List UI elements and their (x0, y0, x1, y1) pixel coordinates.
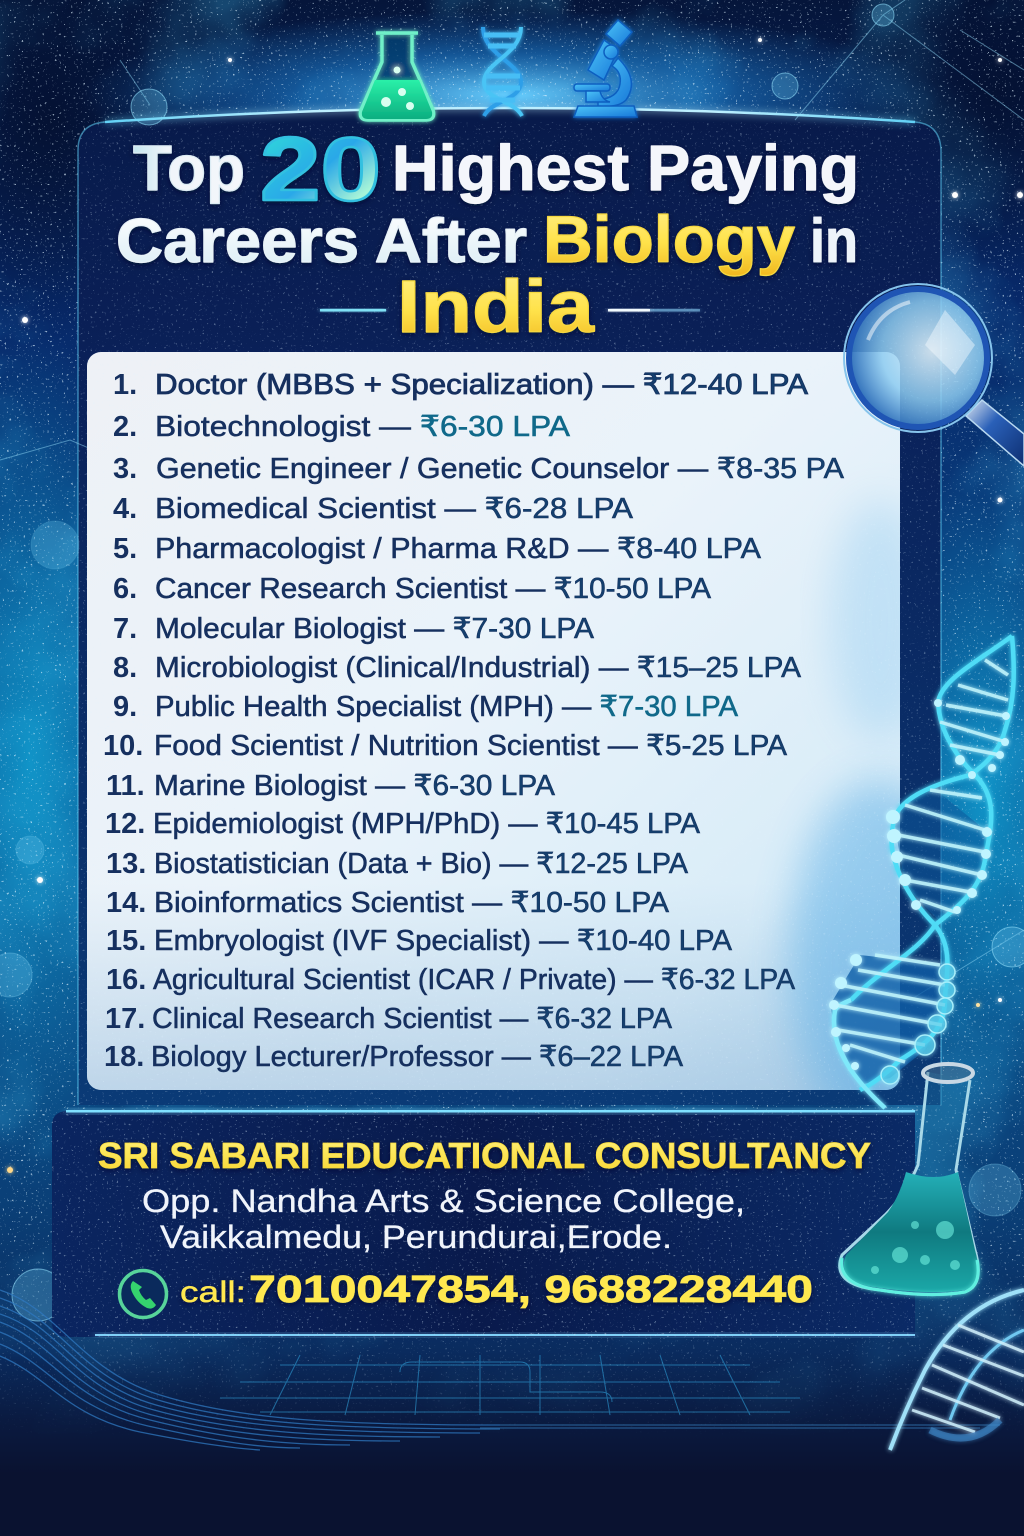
row 11: 11. (106, 770, 145, 802)
row 7: Molecular Biologist — ₹7-30 LPA (155, 613, 595, 645)
horizon glow line (105, 108, 915, 122)
row 5: Pharmacologist / Pharma R&D — ₹8-40 LPA (155, 533, 762, 565)
row 6: Cancer Research Scientist — ₹10-50 LPA (155, 573, 712, 605)
row 15: 15. (106, 925, 146, 957)
row 13: Biostatistician (Data + Bio) — ₹12-25 LPA (154, 848, 689, 880)
title: in (810, 207, 858, 276)
row 3: Genetic Engineer / Genetic Counselor — ₹8-35 PA (156, 453, 845, 485)
row 12: Epidemiologist (MPH/PhD) — ₹10-45 LPA (153, 808, 701, 840)
highlighted word India: India (397, 265, 595, 348)
row 17: 17. (105, 1003, 145, 1035)
highlighted word Biology: Biology (543, 202, 795, 276)
footer: phone numbers: 7010047854, 9688228440 (249, 1269, 813, 1311)
row 8: Microbiologist (Clinical/Industrial) — ₹15–25 LPA (155, 652, 802, 684)
icon: phone (120, 1270, 166, 1318)
row 5: 5. (113, 533, 137, 565)
footer: organisation name: SRI SABARI EDUCATIONAL CONSULTANCY (98, 1135, 871, 1176)
title: Highest Paying (392, 132, 859, 204)
panel star field (78, 122, 941, 1105)
row 18: 18. (104, 1041, 144, 1073)
title (116, 120, 859, 348)
circuit grid floor (220, 1355, 800, 1415)
glass flask (840, 1064, 978, 1295)
row 14: Bioinformatics Scientist — ₹10-50 LPA (154, 887, 670, 919)
row 3: 3. (113, 453, 137, 485)
footer: address (142, 1183, 745, 1255)
row 11: Marine Biologist — ₹6-30 LPA (154, 770, 556, 802)
row 16: 16. (106, 964, 146, 996)
footer star field (52, 1112, 915, 1337)
main dark panel (78, 108, 941, 1105)
icon: microscope (574, 20, 637, 117)
row 2: 2. (113, 411, 137, 443)
footer: phone numbers: call: (180, 1276, 246, 1309)
title side rules (320, 309, 700, 312)
row 15: Embryologist (IVF Specialist) — ₹10-40 LPA (154, 925, 733, 957)
row 2: Biotechnologist — ₹6-30 LPA (155, 411, 571, 443)
row 10: Food Scientist / Nutrition Scientist — ₹5-25 LPA (154, 730, 788, 762)
career list (103, 369, 845, 1073)
row 14: 14. (106, 887, 146, 919)
wave lines bottom left (0, 1290, 1000, 1450)
row 18: Biology Lecturer/Professor — ₹6–22 LPA (151, 1041, 684, 1073)
icon: flask (360, 33, 434, 120)
title: Careers After (116, 207, 527, 276)
row 12: 12. (105, 808, 145, 840)
DNA bottom right (890, 1290, 1024, 1450)
footer panel (52, 1110, 915, 1337)
row 9: Public Health Specialist (MPH) — ₹7-30 LPA (155, 691, 739, 723)
icon: DNA helix (483, 27, 522, 116)
row 4: Biomedical Scientist — ₹6-28 LPA (155, 493, 634, 525)
row 4: 4. (113, 493, 137, 525)
list panel (87, 352, 900, 1090)
row 17: Clinical Research Scientist — ₹6-32 LPA (152, 1003, 673, 1035)
row 1: 1. (113, 369, 137, 401)
row 8: 8. (113, 652, 137, 684)
row 16: Agricultural Scientist (ICAR / Private) — ₹6-32 LPA (153, 964, 796, 996)
row 10: 10. (103, 730, 143, 762)
row 1: Doctor (MBBS + Specialization) — ₹12-40 LPA (155, 369, 809, 401)
footer: address: Opp. Nandha Arts & Science College, (142, 1183, 745, 1219)
number 20 highlight: 20 (260, 120, 381, 220)
magnifying glass (844, 284, 1024, 466)
row 9: 9. (113, 691, 137, 723)
footer: address: Vaikkalmedu, Perundurai,Erode. (160, 1219, 672, 1255)
row 7: 7. (113, 613, 137, 645)
DNA double helix (829, 636, 1014, 1108)
title: Top (133, 132, 245, 204)
row 6: 6. (113, 573, 137, 605)
row 13: 13. (106, 848, 146, 880)
